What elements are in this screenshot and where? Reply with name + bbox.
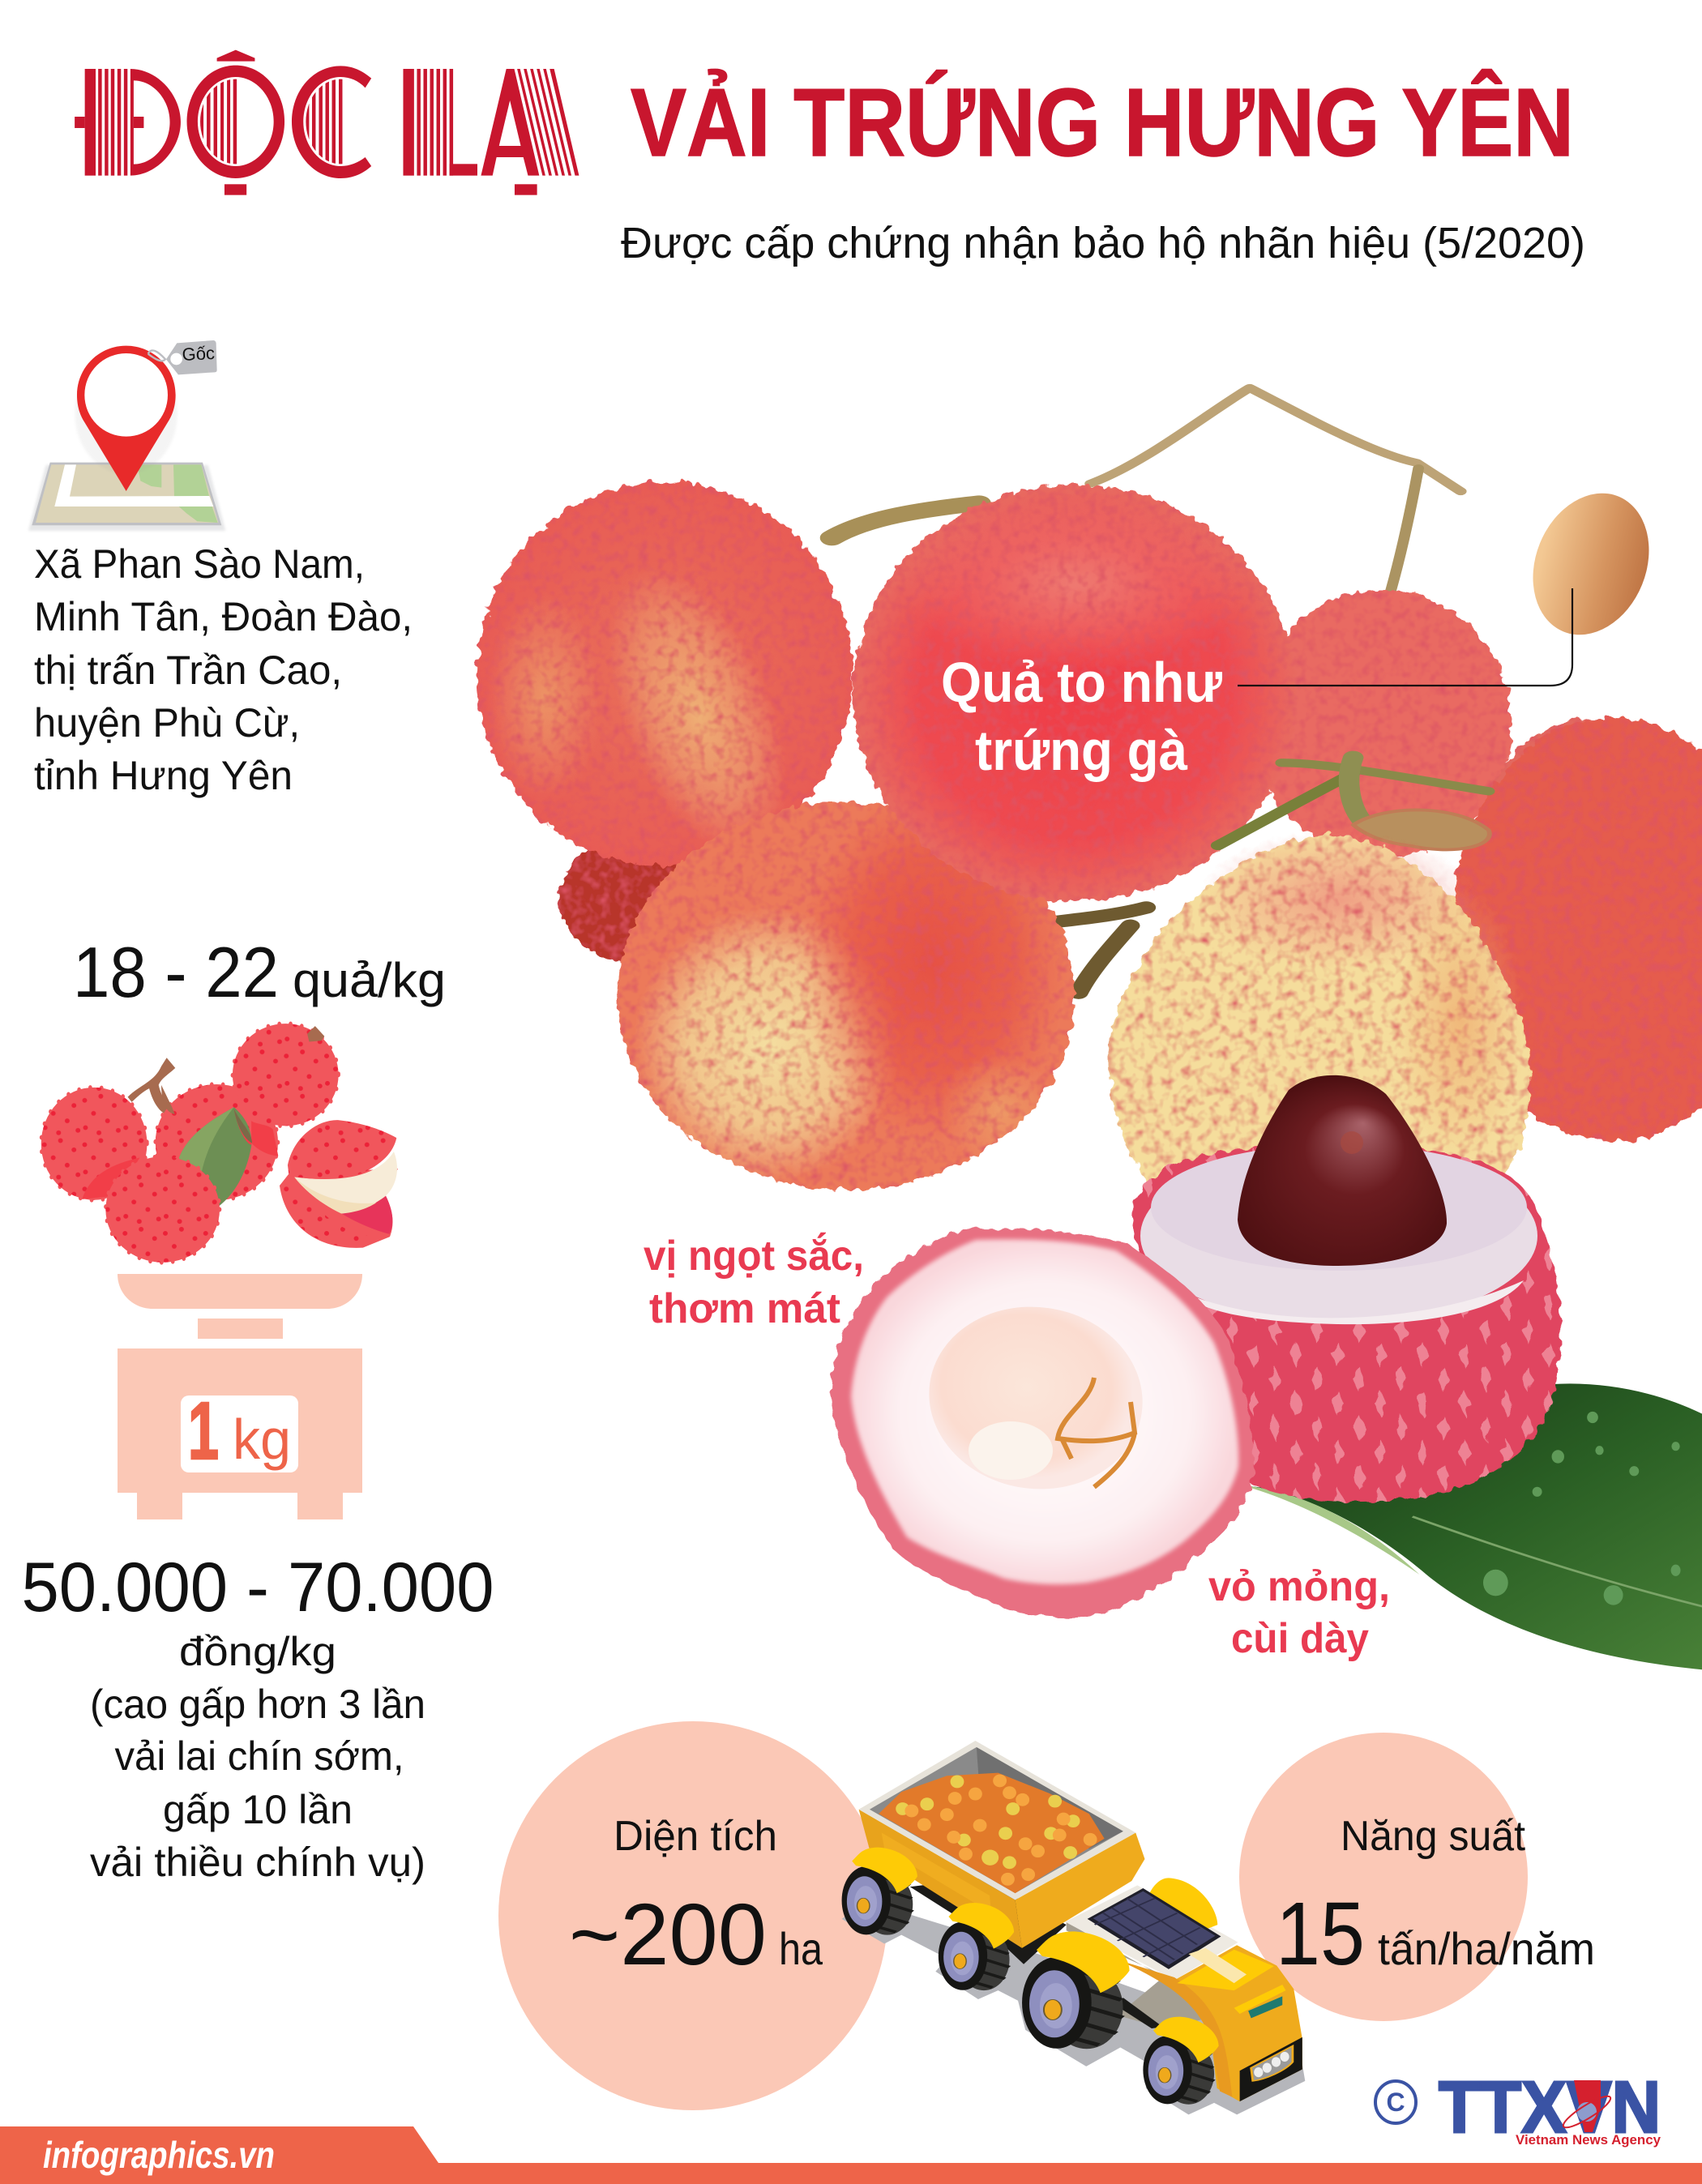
fruit count per kg: 18 - 22 [73, 932, 279, 1012]
photo: opened lychee with seed [1131, 1075, 1560, 1502]
price text: vải lai chín sớm, [115, 1733, 404, 1779]
scale label: 1 kg: 1 [188, 1386, 219, 1477]
callout: egg-sized fruit [941, 651, 1222, 782]
callout: egg-sized fruit: Quả to như [941, 651, 1222, 714]
price text: gấp 10 lần [163, 1787, 353, 1832]
title: VẢI TRỨNG HƯNG YÊN [631, 69, 1574, 177]
logo: TTXVN: C [1386, 2088, 1405, 2117]
callout: thin skin: vỏ mỏng, [1208, 1563, 1390, 1610]
footer bar [0, 2126, 1702, 2184]
icon: map pin with origin tag [28, 340, 225, 531]
yield text: Năng suất [1341, 1813, 1526, 1860]
price text: đồng/kg [179, 1629, 336, 1674]
logo: TTXVN: Vietnam News Agency [1516, 2132, 1661, 2148]
yield text [1276, 1813, 1595, 1984]
location text: thị trấn Trần Cao, [34, 648, 342, 693]
icon: lychee bunch [41, 1024, 398, 1263]
fruit count per kg [73, 932, 446, 1012]
logo: TTXVN: TTXVN [1439, 2067, 1661, 2148]
scale label: 1 kg: kg [233, 1408, 291, 1471]
price text: vải thiều chính vụ) [90, 1840, 426, 1885]
logo heading: ĐỘC LẠ [75, 50, 579, 195]
callout: thin skin [1208, 1563, 1390, 1662]
price text: (cao gấp hơn 3 lần [90, 1682, 426, 1727]
scale label: 1 kg [188, 1386, 291, 1477]
stat circle: area: ~200 [569, 1885, 767, 1983]
yield text: tấn/ha/năm [1378, 1923, 1595, 1974]
subtitle: Được cấp chứng nhận bảo hộ nhãn hiệu (5/2020) [621, 219, 1585, 267]
stat circle: area [498, 1721, 887, 2110]
location text: Minh Tân, Đoàn Đào, [34, 594, 413, 639]
illustration: farm truck [842, 1741, 1305, 2114]
stat circle: area: ha [779, 1923, 823, 1974]
callout: taste [644, 1232, 864, 1332]
callout: taste: vị ngọt sắc, [644, 1232, 864, 1280]
location text [34, 541, 413, 798]
footer source: infographics.vn [43, 2134, 275, 2176]
callout leader line [1238, 588, 1572, 686]
fruit count per kg: quả/kg [293, 953, 446, 1007]
icon: scale [118, 1274, 362, 1519]
icon label: Gốc: Gốc [182, 343, 216, 365]
location text: huyện Phù Cừ, [34, 700, 300, 746]
photo: green leaf [1242, 1383, 1702, 1669]
price text [21, 1549, 494, 1885]
yield text: 15 [1276, 1884, 1365, 1984]
stat circle: area: Diện tích [614, 1813, 777, 1860]
photo: lychee bunch [477, 388, 1702, 1207]
stat circle: yield background [1239, 1733, 1528, 2021]
photo: halved lychee [831, 1229, 1253, 1618]
callout: taste: thơm mát [649, 1285, 840, 1332]
callout: egg-sized fruit: trứng gà [975, 719, 1188, 782]
location text: Xã Phan Sào Nam, [34, 541, 365, 587]
icon: egg [1512, 476, 1670, 652]
location text: tỉnh Hưng Yên [34, 753, 293, 798]
price text: 50.000 - 70.000 [21, 1549, 494, 1626]
callout: thin skin: cùi dày [1231, 1615, 1369, 1662]
